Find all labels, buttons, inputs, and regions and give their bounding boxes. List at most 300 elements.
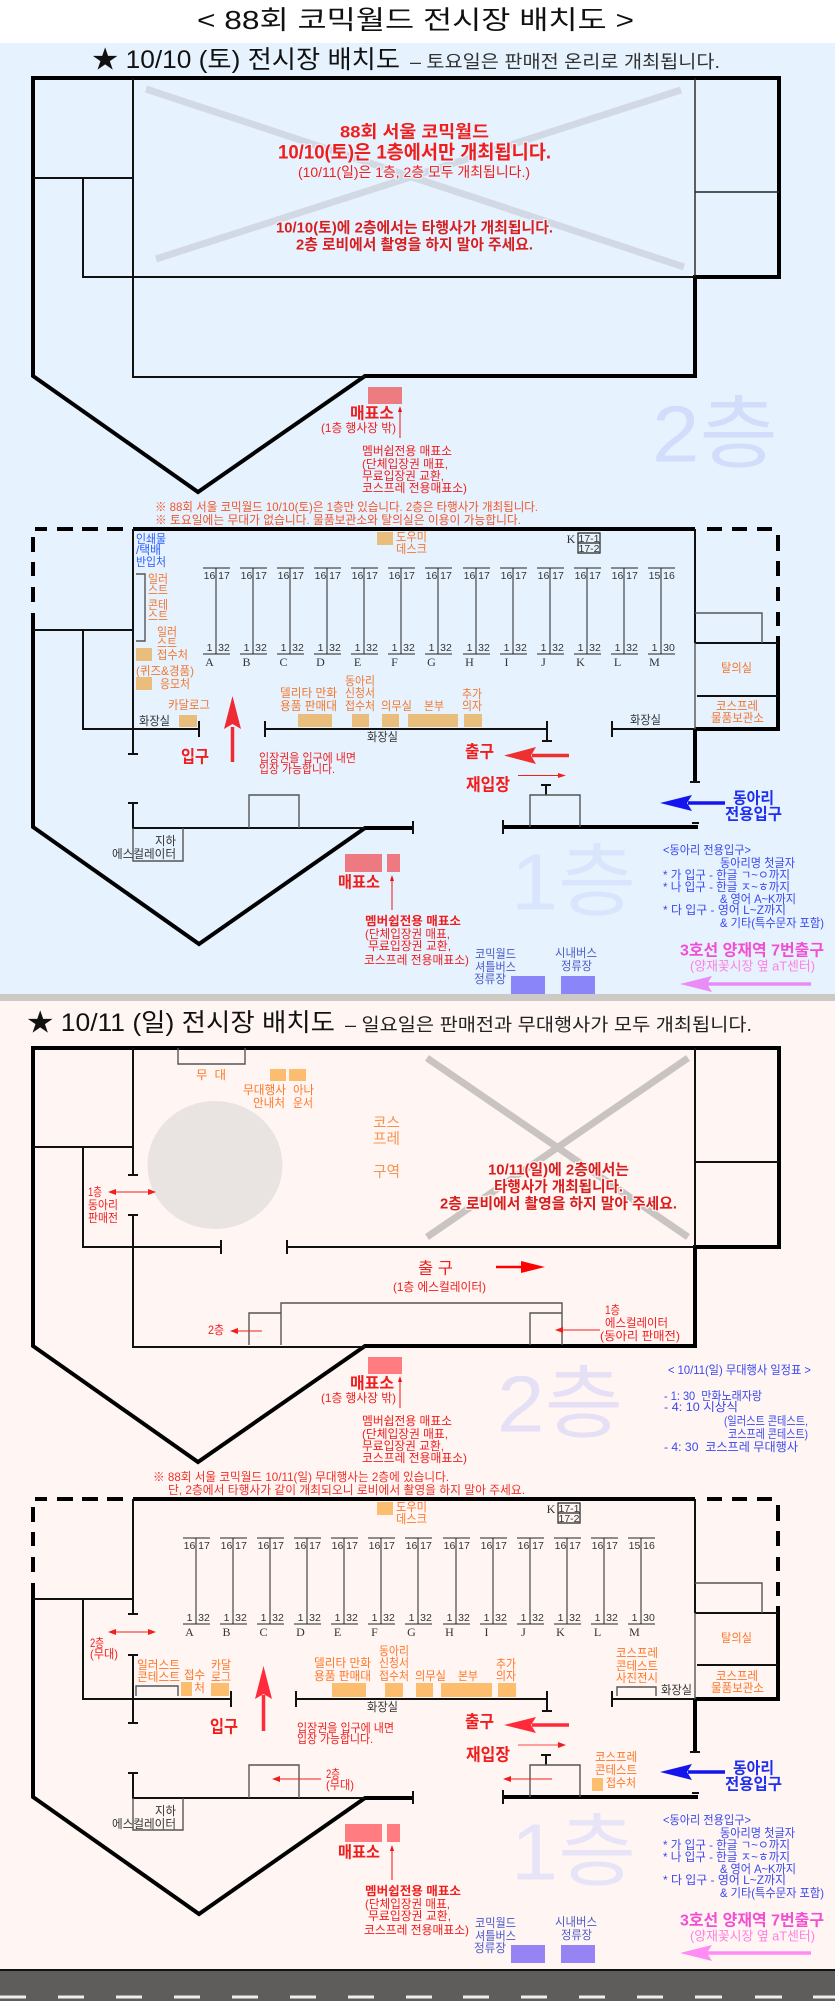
label and arrow: subway exit — [680, 942, 824, 992]
label: cosplay zone — [373, 1114, 400, 1180]
booth aisles A to M: 32 — [589, 642, 601, 654]
booth aisles A to M: 1 — [224, 1612, 230, 1624]
service desks and orange labels: 코스프레 — [595, 1750, 637, 1764]
booth aisles A to M: 1 — [409, 1612, 415, 1624]
booth aisles A to M: F — [371, 1625, 378, 1639]
booth aisles A to M: E — [354, 655, 361, 669]
legend: club entrance groups: * 가 입구 - 한글 ㄱ~ㅇ까지 — [663, 868, 790, 882]
booth aisles A to M: D — [316, 655, 325, 669]
label: cosplay zone: 코스 — [373, 1114, 400, 1132]
ticket booth first floor — [338, 1824, 469, 1937]
booth K extra table: 17-1 — [578, 533, 600, 545]
legend: club entrance groups — [663, 1813, 824, 1900]
service desks and orange labels: 코스프레 — [716, 699, 758, 713]
booth aisles A to M: 16 — [315, 570, 326, 582]
notice: Sunday second floor other event: 10/11(일)에 2층에서는 — [488, 1162, 629, 1178]
booth aisles A to M: 17 — [440, 570, 452, 582]
booth aisles A to M: 1 — [615, 642, 621, 654]
booth aisles A to M: 32 — [383, 1612, 395, 1624]
schedule: Sunday stage events: 코스프레 콘테스트) — [728, 1427, 808, 1441]
service desks and orange labels: 접수처 — [345, 699, 375, 713]
label and arrow: escalator to stage: (무대) — [326, 1778, 354, 1792]
booth aisles A to M: 1 — [429, 642, 435, 654]
label and arrow: stage on second floor — [90, 1629, 156, 1661]
label and arrow: club entrance: 동아리 — [733, 1760, 774, 1778]
booth aisles A to M: L — [614, 655, 621, 669]
label: cosplay zone: 프레 — [373, 1130, 400, 1148]
booth K extra table — [547, 1502, 580, 1525]
booth aisles A to M: 32 — [478, 642, 490, 654]
booth aisles A to M: 16 — [204, 570, 215, 582]
ticket booth second floor view: 무료입장권 교환, — [362, 469, 444, 483]
booth aisles A to M: 17 — [235, 1540, 247, 1552]
booth aisles A to M: 17 — [309, 1540, 321, 1552]
legend: club entrance groups: <동아리 전용입구> — [663, 1813, 751, 1827]
label and arrow: stage on second floor: (무대) — [90, 1647, 118, 1661]
booth aisles A to M: 17 — [272, 1540, 284, 1552]
booth aisles A to M: 1 — [632, 1612, 638, 1624]
service desks and orange labels: 추가 — [462, 687, 482, 701]
bus stops: 정류장 — [561, 959, 592, 973]
booth aisles A to M: H — [465, 655, 474, 669]
booth K extra table: 17-2 — [558, 1513, 580, 1525]
service desks and orange labels — [137, 1500, 764, 1791]
arrow: entrance — [224, 696, 241, 762]
floor label: 1층: 1층 — [511, 838, 636, 926]
service desks and orange labels: 도우미 — [396, 530, 427, 544]
panel: Sunday 10/11 layout — [0, 1001, 835, 1970]
booth aisles A to M: 16 — [464, 570, 475, 582]
booth aisles A to M: F — [391, 655, 398, 669]
booth aisles A to M: 1 — [392, 642, 398, 654]
booth aisles A to M: 30 — [643, 1612, 655, 1624]
booth aisles A to M: 32 — [255, 642, 267, 654]
booth aisles A to M: K — [576, 655, 585, 669]
restroom labels: 화장실 — [139, 714, 170, 728]
booth aisles A to M: 30 — [663, 642, 675, 654]
bus stops: 셔틀버스 — [475, 1929, 516, 1943]
booth aisles A to M: 17 — [346, 1540, 358, 1552]
bus stops: 코믹월드 — [475, 947, 516, 961]
booth aisles A to M: 32 — [218, 642, 230, 654]
stage and announcers labels: 운서 — [293, 1096, 313, 1110]
service desks and orange labels: 용품 판매대 — [280, 699, 337, 713]
ticket booth first floor — [338, 854, 469, 967]
bus stops: 코믹월드 — [475, 1916, 516, 1930]
heading: Sunday: – 일요일은 판매전과 무대행사가 모두 개최됩니다. — [345, 1015, 752, 1035]
ticket booth second floor view — [321, 387, 467, 495]
booth aisles A to M: 1 — [281, 642, 287, 654]
ticket booth first floor: 멤버쉽전용 매표소 — [365, 1883, 461, 1898]
label: entrance: 입장 가능합니다. — [259, 762, 335, 776]
floor label: 2층: 2층 — [497, 1360, 623, 1448]
crossed out hall mark — [146, 89, 684, 267]
heading: Saturday — [92, 46, 720, 74]
legend: club entrance groups: & 기타(특수문자 포함) — [720, 916, 824, 930]
bus stops: 정류장 — [474, 972, 506, 986]
booth aisles A to M: 17 — [552, 570, 564, 582]
notes: Saturday — [155, 499, 538, 527]
notice: Saturday second floor closed: 10/10(토)은 1층에서만 개최됩니다. — [278, 142, 551, 164]
notice: Sunday second floor other event: 타행사가 개최됩니다. — [494, 1178, 623, 1196]
booth aisles A to M: 1 — [355, 642, 361, 654]
booth aisles A to M: 16 — [258, 1540, 269, 1552]
booth aisles A to M: J — [541, 655, 546, 669]
service desks and orange labels: 로그 — [211, 1670, 231, 1684]
legend: club entrance groups: * 나 입구 - 한글 ㅈ~ㅎ까지 — [663, 880, 790, 894]
booth aisles A to M: 16 — [592, 1540, 603, 1552]
service desks and orange labels: 접수처 — [379, 1669, 409, 1683]
booth aisles A to M: 17 — [606, 1540, 618, 1552]
booth aisles A to M: 17 — [458, 1540, 470, 1552]
booth aisles A to M: 32 — [440, 642, 452, 654]
booth aisles A to M: 1 — [595, 1612, 601, 1624]
booth aisles A to M: 17 — [626, 570, 638, 582]
booth aisles A to M: 17 — [495, 1540, 507, 1552]
label and arrow: club entrance: 전용입구 — [725, 806, 782, 824]
bus stops: 정류장 — [561, 1928, 592, 1942]
service desks and orange labels: 탈의실 — [721, 661, 752, 675]
label: entrance: 입장권을 입구에 내면 — [297, 1721, 394, 1735]
booth aisles A to M: I — [484, 1625, 488, 1639]
service desks and orange labels: 추가 — [496, 1657, 516, 1671]
labels: second floor lobby arrows: 1층 — [605, 1303, 620, 1317]
restroom labels: 화장실 — [367, 730, 398, 744]
legend: club entrance groups: & 영어 A~K까지 — [720, 1862, 796, 1876]
label and arrow: club sale entrance — [88, 1185, 156, 1225]
floor label: 1층: 1층 — [511, 1808, 636, 1896]
service desks and orange labels: 일러 — [148, 572, 168, 586]
booth aisles A to M: L — [594, 1625, 601, 1639]
floor plan: second floor walls — [33, 78, 779, 492]
booth aisles A to M: 1 — [521, 1612, 527, 1624]
booth aisles A to M: 16 — [538, 570, 549, 582]
booth aisles A to M: 16 — [426, 570, 437, 582]
restroom labels: 에스컬레이터 — [112, 1817, 176, 1831]
service desks and orange labels: 본부 — [458, 1669, 478, 1683]
heading: Saturday: – 토요일은 판매전 온리로 개최됩니다. — [410, 52, 720, 72]
ticket booth first floor: 무료입장권 교환, — [368, 1909, 451, 1923]
label and arrow: club entrance — [660, 790, 782, 824]
booth aisles A to M: 1 — [484, 1612, 490, 1624]
service desks and orange labels: 의무실 — [415, 1669, 446, 1683]
booth aisles A to M: 15 — [649, 570, 660, 582]
service desks and orange labels: 카달 — [211, 1658, 231, 1672]
booth aisles A to M: 16 — [444, 1540, 455, 1552]
booth aisles A to M: B — [222, 1625, 231, 1639]
booth aisles A to M: 32 — [606, 1612, 618, 1624]
booth aisles A to M: 17 — [366, 570, 378, 582]
booth aisles A to M: 17 — [532, 1540, 544, 1552]
label: entrance — [210, 1718, 394, 1746]
ticket booth second floor view — [321, 1357, 467, 1465]
booth aisles A to M: 16 — [389, 570, 400, 582]
arrow: entrance — [255, 1666, 272, 1731]
service desks and orange labels: 콘테스트 — [616, 1659, 658, 1673]
label and arrow: club sale entrance: 1층 — [88, 1185, 102, 1199]
booth aisles A to M: M — [649, 655, 660, 669]
label: print delivery entrance: 인쇄물 — [136, 532, 166, 546]
service desks and orange labels: 일러 — [157, 625, 177, 639]
notes: Sunday — [153, 1469, 525, 1497]
booth aisles A to M: 16 — [555, 1540, 566, 1552]
ticket booth first floor: 코스프레 전용매표소) — [364, 1923, 469, 1937]
restroom labels — [112, 713, 661, 861]
stage area circle — [148, 1101, 282, 1229]
bus stops: 시내버스 — [555, 1915, 597, 1929]
booth aisles A to M — [183, 1538, 655, 1639]
legend: club entrance groups — [663, 843, 824, 930]
booth aisles A to M: 16 — [501, 570, 512, 582]
label and arrow: subway exit: (양재꽃시장 옆 aT센터) — [690, 1928, 815, 1944]
notes: Sunday: ※ 88회 서울 코믹월드 10/11(일) 무대행사는 2층에 있습니다. — [153, 1469, 449, 1484]
booth aisles A to M: 16 — [332, 1540, 343, 1552]
service desks and orange labels: 스트 — [148, 609, 168, 623]
label: print delivery entrance: /택배 — [136, 543, 161, 557]
booth aisles A to M: 1 — [467, 642, 473, 654]
floor plan: first floor walls — [33, 1499, 778, 1914]
label and arrow: re-entry — [466, 1742, 566, 1764]
service desks and orange labels: 콘테스트 — [595, 1763, 637, 1777]
crossed out hall mark — [427, 1058, 688, 1237]
booth aisles A to M: 32 — [515, 642, 527, 654]
schedule: Sunday stage events: (일러스트 콘테스트, — [724, 1414, 808, 1428]
label and arrow: subway exit: 3호선 양재역 7번출구 — [680, 1912, 824, 1930]
bus stops — [474, 946, 597, 994]
service desks and orange labels: 코스프레 — [716, 1669, 758, 1683]
service desks and orange labels — [136, 530, 764, 727]
stage and announcers labels: 무대행사 — [243, 1082, 286, 1097]
label: print delivery entrance: 반입처 — [136, 555, 166, 569]
service desks and orange labels: 콘테 — [148, 598, 168, 612]
booth aisles A to M: 17 — [329, 570, 341, 582]
notes: Saturday: ※ 88회 서울 코믹월드 10/10(토)은 1층만 있습니다. 2층은 타행사가 개최됩니다. — [155, 499, 538, 514]
legend: club entrance groups: & 기타(특수문자 포함) — [720, 1886, 824, 1900]
bus stops: 정류장 — [474, 1941, 506, 1955]
service desks and orange labels: (퀴즈&경품) — [136, 664, 194, 678]
booth aisles A to M: 1 — [541, 642, 547, 654]
ticket booth second floor view: 코스프레 전용매표소) — [362, 481, 467, 495]
label and arrow: re-entry: 재입장 — [466, 776, 510, 794]
restroom labels: 에스컬레이터 — [112, 847, 176, 861]
booth aisles A to M: 32 — [495, 1612, 507, 1624]
ticket booth first floor: 매표소 — [338, 874, 380, 892]
legend: club entrance groups: * 다 입구 - 영어 L~Z까지 — [663, 903, 786, 917]
restroom labels — [112, 1683, 692, 1831]
booth aisles A to M: 17 — [403, 570, 415, 582]
label and arrow: exit via escalator — [393, 1260, 545, 1294]
service desks and orange labels: 동아리 — [379, 1644, 409, 1658]
booth aisles A to M: 1 — [207, 642, 213, 654]
ticket booth second floor view: (1층 행사장 밖) — [321, 1390, 396, 1405]
restroom labels: 화장실 — [367, 1700, 398, 1714]
booth K extra table: 17-2 — [578, 543, 600, 555]
service desks and orange labels: 스트 — [148, 583, 168, 597]
service desks and orange labels: 동아리 — [345, 674, 375, 688]
booth aisles A to M: 32 — [569, 1612, 581, 1624]
booth aisles A to M: 32 — [292, 642, 304, 654]
ticket booth second floor view: 멤버쉽전용 매표소 — [362, 1414, 452, 1428]
booth aisles A to M: 16 — [612, 570, 623, 582]
label and arrow: club sale entrance: 판매전 — [88, 1211, 118, 1225]
booth aisles A to M: 32 — [532, 1612, 544, 1624]
booth aisles A to M: 32 — [403, 642, 415, 654]
stage and announcers labels: 안내처 — [253, 1096, 285, 1110]
ticket booth second floor view: (1층 행사장 밖) — [321, 420, 396, 435]
label: entrance: 입장 가능합니다. — [297, 1732, 373, 1746]
booth aisles A to M: 1 — [298, 1612, 304, 1624]
service desks and orange labels: 스트 — [157, 636, 177, 650]
booth aisles A to M: 32 — [309, 1612, 321, 1624]
stage and announcers labels: 아나 — [293, 1083, 314, 1097]
service desks and orange labels: 처 — [194, 1681, 205, 1695]
service desks and orange labels: 사진전시 — [616, 1671, 658, 1685]
label and arrow: subway exit — [680, 1912, 824, 1961]
booth aisles A to M: 17 — [292, 570, 304, 582]
bus stops: 시내버스 — [555, 946, 597, 960]
service desks and orange labels: 용품 판매대 — [314, 1669, 371, 1683]
booth aisles A to M: C — [279, 655, 288, 669]
panel: Saturday 10/10 layout — [0, 43, 835, 994]
label and arrow: club sale entrance: 동아리 — [88, 1198, 118, 1212]
notice: Sunday second floor other event — [440, 1162, 677, 1212]
booth aisles A to M: B — [242, 655, 251, 669]
service desks and orange labels: 도우미 — [396, 1500, 427, 1514]
booth aisles A to M: 16 — [241, 570, 252, 582]
booth aisles A to M: 1 — [558, 1612, 564, 1624]
booth aisles A to M: 17 — [478, 570, 490, 582]
restroom labels: 지하 — [155, 834, 176, 848]
booth K extra table: K — [547, 1502, 556, 1516]
notice: Saturday second floor closed — [276, 122, 553, 254]
label and arrow: exit via escalator: 출 구 — [418, 1260, 453, 1278]
service desks and orange labels: 데스크 — [396, 542, 427, 556]
booth aisles A to M: 16 — [663, 570, 675, 582]
booth aisles A to M: 32 — [458, 1612, 470, 1624]
legend: club entrance groups: <동아리 전용입구> — [663, 843, 751, 857]
legend: club entrance groups: * 다 입구 - 영어 L~Z까지 — [663, 1873, 786, 1887]
restroom labels: 지하 — [155, 1804, 176, 1818]
restroom labels: 화장실 — [630, 713, 661, 727]
booth aisles A to M: 1 — [504, 642, 510, 654]
service desks and orange labels: 탈의실 — [721, 1631, 752, 1645]
label and arrow: club entrance: 전용입구 — [725, 1776, 782, 1794]
notice: Saturday second floor closed: 88회 서울 코믹월드 — [340, 122, 489, 142]
service desks and orange labels: 물품보관소 — [711, 711, 764, 725]
ticket booth first floor: 무료입장권 교환, — [368, 939, 451, 953]
booth aisles A to M: 1 — [335, 1612, 341, 1624]
service desks and orange labels: 일러스트 — [137, 1658, 180, 1672]
booth aisles A to M: 32 — [346, 1612, 358, 1624]
label: entrance — [181, 748, 356, 776]
ticket booth first floor: 매표소 — [338, 1844, 380, 1862]
schedule: Sunday stage events: < 10/11(일) 무대행사 일정표 > — [668, 1362, 811, 1377]
ticket booth second floor view: 매표소 — [350, 404, 394, 422]
booth aisles A to M: E — [334, 1625, 341, 1639]
schedule: Sunday stage events: - 4: 10 시상식 — [664, 1400, 738, 1414]
ticket booth second floor view: 무료입장권 교환, — [362, 1439, 444, 1453]
booth aisles A to M: 32 — [235, 1612, 247, 1624]
ticket booth second floor view: 코스프레 전용매표소) — [362, 1451, 467, 1465]
booth aisles A to M: I — [504, 655, 508, 669]
booth aisles A to M: 16 — [221, 1540, 232, 1552]
booth aisles A to M: A — [205, 655, 214, 669]
booth aisles A to M: 32 — [420, 1612, 432, 1624]
booth aisles A to M: 16 — [643, 1540, 655, 1552]
booth aisles A to M — [203, 568, 675, 669]
label and arrow: re-entry: 재입장 — [466, 1746, 510, 1764]
booth aisles A to M: 32 — [626, 642, 638, 654]
booth K extra table — [567, 532, 600, 555]
label: entrance: 입장권을 입구에 내면 — [259, 751, 356, 765]
booth aisles A to M: 1 — [187, 1612, 193, 1624]
label: entrance: 입구 — [210, 1718, 238, 1736]
floor plan: second floor walls — [33, 1048, 779, 1462]
booth aisles A to M: G — [427, 655, 436, 669]
booth aisles A to M: K — [556, 1625, 565, 1639]
floor plan: first floor walls — [33, 529, 778, 944]
booth aisles A to M: 17 — [589, 570, 601, 582]
legend: club entrance groups: * 가 입구 - 한글 ㄱ~ㅇ까지 — [663, 1838, 790, 1852]
ticket booth second floor view: 매표소 — [350, 1374, 394, 1392]
service desks and orange labels: 코스프레 — [616, 1646, 658, 1660]
bus stops: 셔틀버스 — [475, 960, 516, 974]
booth aisles A to M: 16 — [352, 570, 363, 582]
schedule: Sunday stage events: - 4: 30 코스프레 무대행사 — [664, 1439, 798, 1454]
legend: club entrance groups: 동아리명 첫글자 — [720, 1826, 795, 1840]
labels: second floor lobby arrows: 에스컬레이터 — [605, 1316, 668, 1330]
booth aisles A to M: 17 — [420, 1540, 432, 1552]
service desks and orange labels: 의무실 — [381, 699, 412, 713]
labels: second floor lobby arrows — [208, 1303, 680, 1343]
label and arrow: exit — [465, 742, 569, 764]
booth aisles A to M: 17 — [569, 1540, 581, 1552]
booth aisles A to M: 16 — [278, 570, 289, 582]
service desks and orange labels: 신청서 — [379, 1656, 409, 1670]
booth aisles A to M: 16 — [575, 570, 586, 582]
notice: Saturday second floor closed: (10/11(일)은 1층, 2층 모두 개최됩니다.) — [298, 164, 530, 180]
booth aisles A to M: 1 — [652, 642, 658, 654]
label and arrow: subway exit: (양재꽃시장 옆 aT센터) — [690, 958, 815, 974]
booth aisles A to M: 1 — [261, 1612, 267, 1624]
label and arrow: exit via escalator: (1층 에스컬레이터) — [393, 1280, 486, 1294]
booth aisles A to M: 16 — [518, 1540, 529, 1552]
booth aisles A to M: 32 — [272, 1612, 284, 1624]
ticket booth second floor view: (단체입장권 매표, — [362, 457, 448, 471]
service desks and orange labels: 본부 — [424, 699, 444, 713]
booth aisles A to M: J — [521, 1625, 526, 1639]
booth aisles A to M: 32 — [552, 642, 564, 654]
notes: Sunday: 단, 2층에서 타행사가 같이 개최되오니 로비에서 촬영을 하지 말아 주세요. — [168, 1482, 525, 1497]
booth aisles A to M: 1 — [372, 1612, 378, 1624]
label and arrow: exit: 출구 — [465, 1712, 494, 1732]
booth aisles A to M: 1 — [318, 642, 324, 654]
service desks and orange labels: 카달로그 — [168, 698, 210, 712]
notice: Sunday second floor other event: 2층 로비에서 촬영을 하지 말아 주세요. — [440, 1194, 677, 1212]
booth aisles A to M: 17 — [515, 570, 527, 582]
booth aisles A to M: 1 — [244, 642, 250, 654]
service desks and orange labels: 신청서 — [345, 686, 375, 700]
label and arrow: stage on second floor: 2층 — [90, 1636, 104, 1650]
label and arrow: club entrance — [660, 1760, 782, 1794]
ticket booth first floor: (단체입장권 매표, — [365, 1897, 450, 1911]
booth aisles A to M: 32 — [198, 1612, 210, 1624]
booth aisles A to M: 16 — [406, 1540, 417, 1552]
floor label: 2층: 2층 — [652, 390, 778, 478]
service desks and orange labels: 델리타 만화 — [314, 1656, 371, 1670]
heading: Sunday: ★ 10/11 (일) 전시장 배치도 — [27, 1009, 335, 1037]
service desks and orange labels: 응모처 — [160, 677, 190, 691]
